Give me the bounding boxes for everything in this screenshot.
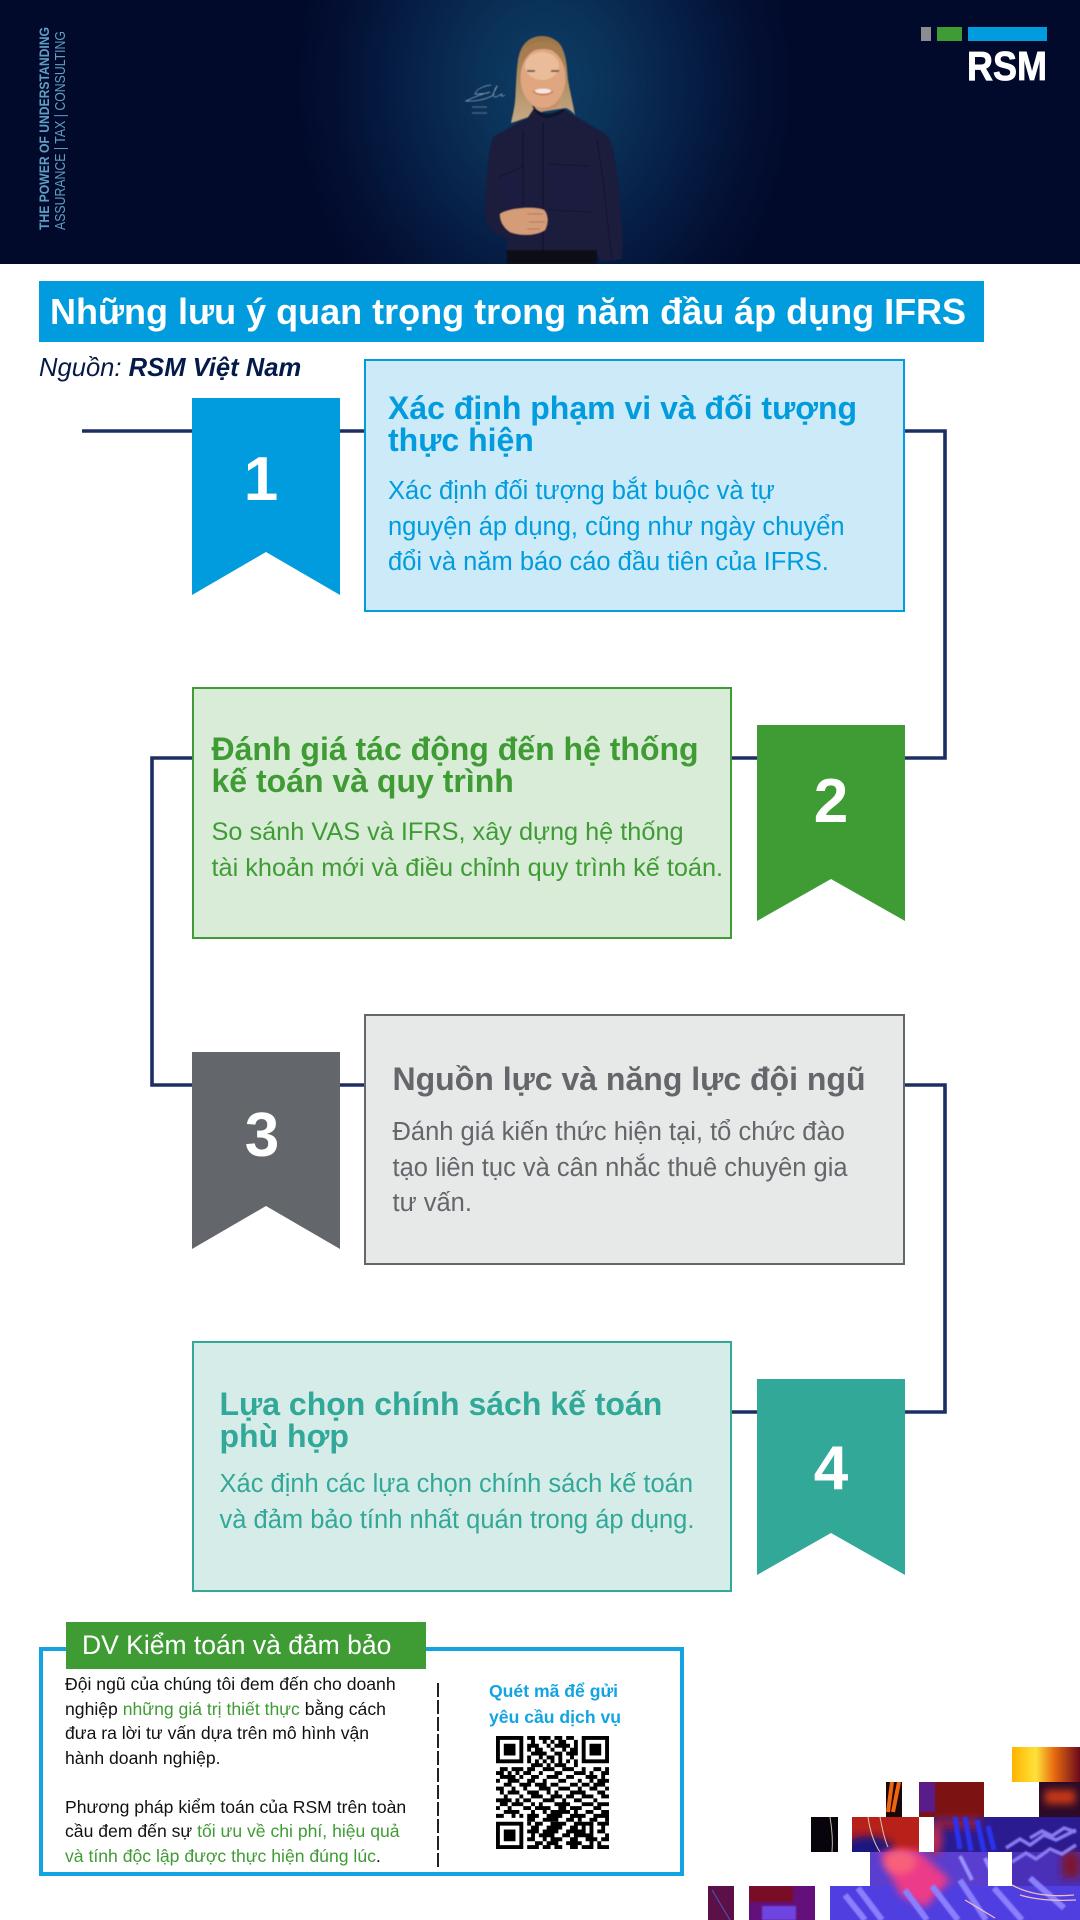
QR call to action: Quét mã để gửi [489,1681,618,1701]
portrait [484,36,623,264]
step 1 body: Xác định đối tượng bắt buộc và tự [388,477,775,505]
step 2 body: So sánh VAS và IFRS, xây dựng hệ thống [212,818,684,846]
step 4 ribbon: 4 [814,1434,849,1503]
service description: Phương pháp kiểm toán của RSM trên toàn [65,1796,406,1816]
step 1 heading: Xác định phạm vi và đối tượng [388,390,857,426]
tagline: THE POWER OF UNDERSTANDING [36,27,52,230]
service description: hành doanh nghiệp. [65,1748,221,1768]
step 3 body [392,1118,848,1217]
step 2 ribbon: 2 [814,767,848,836]
step 1 heading [388,390,857,458]
service description: Đội ngũ của chúng tôi đem đến cho doanh [65,1674,396,1694]
service description: và tính độc lập được thực hiện đúng lúc. [65,1846,381,1866]
step 1 panel [364,359,905,612]
step 1 ribbon [192,398,340,595]
light streaks [845,1817,1076,1920]
QR call to action [489,1681,621,1727]
step 1 heading: thực hiện [388,422,534,458]
banner: portrait on dark blue background [0,0,1080,264]
step 1 body: nguyện áp dụng, cũng như ngày chuyển [388,513,845,541]
service description: cầu đem đến sự tối ưu về chi phí, hiệu quả [65,1821,400,1841]
step 2 heading: kế toán và quy trình [212,762,514,798]
RSM logo [921,27,1047,89]
step 4 ribbon [757,1379,905,1575]
step 1 ribbon: 1 [244,445,278,514]
step 3 ribbon: 3 [245,1101,279,1170]
service tab heading [66,1622,426,1669]
panel: audit and assurance service [39,1647,684,1876]
step 3 body: tư vấn. [392,1189,472,1217]
step 4 heading: Lựa chọn chính sách kế toán [220,1386,662,1422]
step 2 body: tài khoản mới và điều chỉnh quy trình kế toán. [212,854,723,882]
step 2 body [212,818,723,882]
step 4 heading: phù hợp [220,1418,349,1454]
signature [466,85,505,113]
step 2 heading: Đánh giá tác động đến hệ thống [212,730,699,766]
service description: nghiệp những giá trị thiết thực bằng cách [65,1698,386,1718]
step 3 heading: Nguồn lực và năng lực đội ngũ [392,1060,866,1096]
step 2 heading [212,730,699,798]
step 2 panel [192,687,732,939]
step 4 body [220,1470,694,1534]
step 3 panel [364,1014,905,1265]
title [39,281,984,342]
decorative abstract light mosaic [708,1747,1080,1920]
step 3 body: Đánh giá kiến thức hiện tại, tổ chức đào [392,1118,845,1146]
step 4 body: Xác định các lựa chọn chính sách kế toán [220,1470,693,1498]
service description: đưa ra lời tư vấn dựa trên mô hình vận [65,1723,369,1743]
title: Những lưu ý quan trọng trong năm đầu áp dụng IFRS [50,291,966,332]
service tab heading: DV Kiểm toán và đảm bảo [82,1630,391,1660]
step 4 heading [220,1386,662,1454]
tagline [36,27,69,230]
step 1 body [388,476,845,576]
tagline: ASSURANCE | TAX | CONSULTING [53,31,69,230]
pink highlight [880,1850,950,1908]
source line: Nguồn: RSM Việt Nam [39,354,301,382]
step 3 ribbon [192,1052,340,1249]
dashed divider [437,1683,439,1867]
step 2 ribbon [757,725,905,921]
step 4 body: và đảm bảo tính nhất quán trong áp dụng. [220,1506,694,1534]
step 3 body: tạo liên tục và cân nhắc thuê chuyên gia [392,1154,848,1182]
service description [65,1674,406,1866]
step 4 panel [192,1341,732,1592]
step 1 body: đổi và năm báo cáo đầu tiên của IFRS. [388,548,829,576]
RSM logo: RSM [967,43,1047,89]
QR call to action: yêu cầu dịch vụ [489,1707,621,1727]
QR code [496,1736,609,1849]
